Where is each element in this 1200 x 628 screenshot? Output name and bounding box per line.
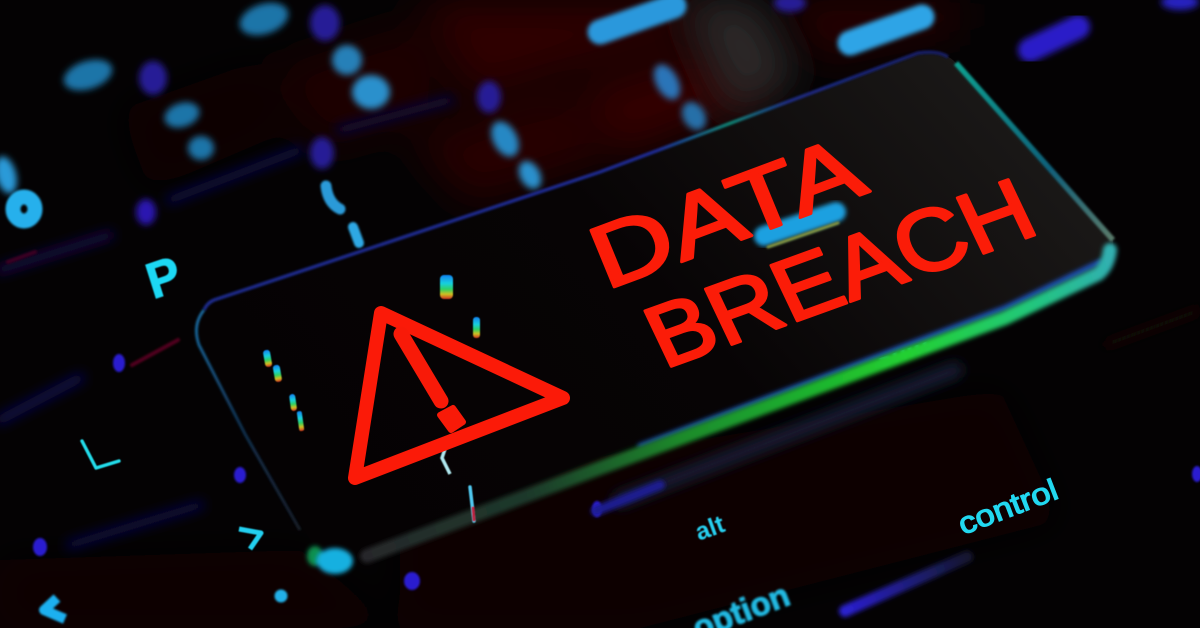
glass bottom lit edge <box>367 250 1110 556</box>
glass left edge <box>196 310 300 530</box>
headline: BREACH: BREACH <box>629 159 1050 386</box>
purple key underglow <box>845 557 967 611</box>
refracted space-bar glow behind text <box>764 212 838 247</box>
key legend: control: control <box>954 473 1063 542</box>
glass corner highlight <box>307 546 353 574</box>
key legend: shift and its reflection: shift <box>872 326 934 373</box>
glass top edge <box>204 52 948 310</box>
glass key <box>195 52 1113 574</box>
lower keycaps <box>0 390 1060 628</box>
key legend: alt: alt <box>691 510 729 547</box>
headline: DATA: DATA <box>575 116 878 308</box>
glass bottom blue fringe <box>640 262 1100 446</box>
key legends, lower left <box>33 354 1200 619</box>
key legend: shift and its reflection: shift <box>867 317 924 360</box>
grey gaps between keycaps <box>680 0 800 115</box>
exclamation bar <box>401 334 441 401</box>
glass body <box>195 52 1113 564</box>
refracted key legends seen through glass <box>263 275 480 521</box>
blurred keyboard legends, top <box>0 0 1199 243</box>
exclamation dot <box>440 408 463 430</box>
faint crimson reflections <box>8 252 178 365</box>
glass right edge <box>956 63 1113 240</box>
blue underglow next to alt key <box>596 485 660 511</box>
warning triangle icon <box>355 313 563 478</box>
faint purple key underglow strips <box>0 100 1200 545</box>
red-tinted upper keycaps <box>120 0 960 205</box>
key legend: P: P <box>139 245 188 310</box>
